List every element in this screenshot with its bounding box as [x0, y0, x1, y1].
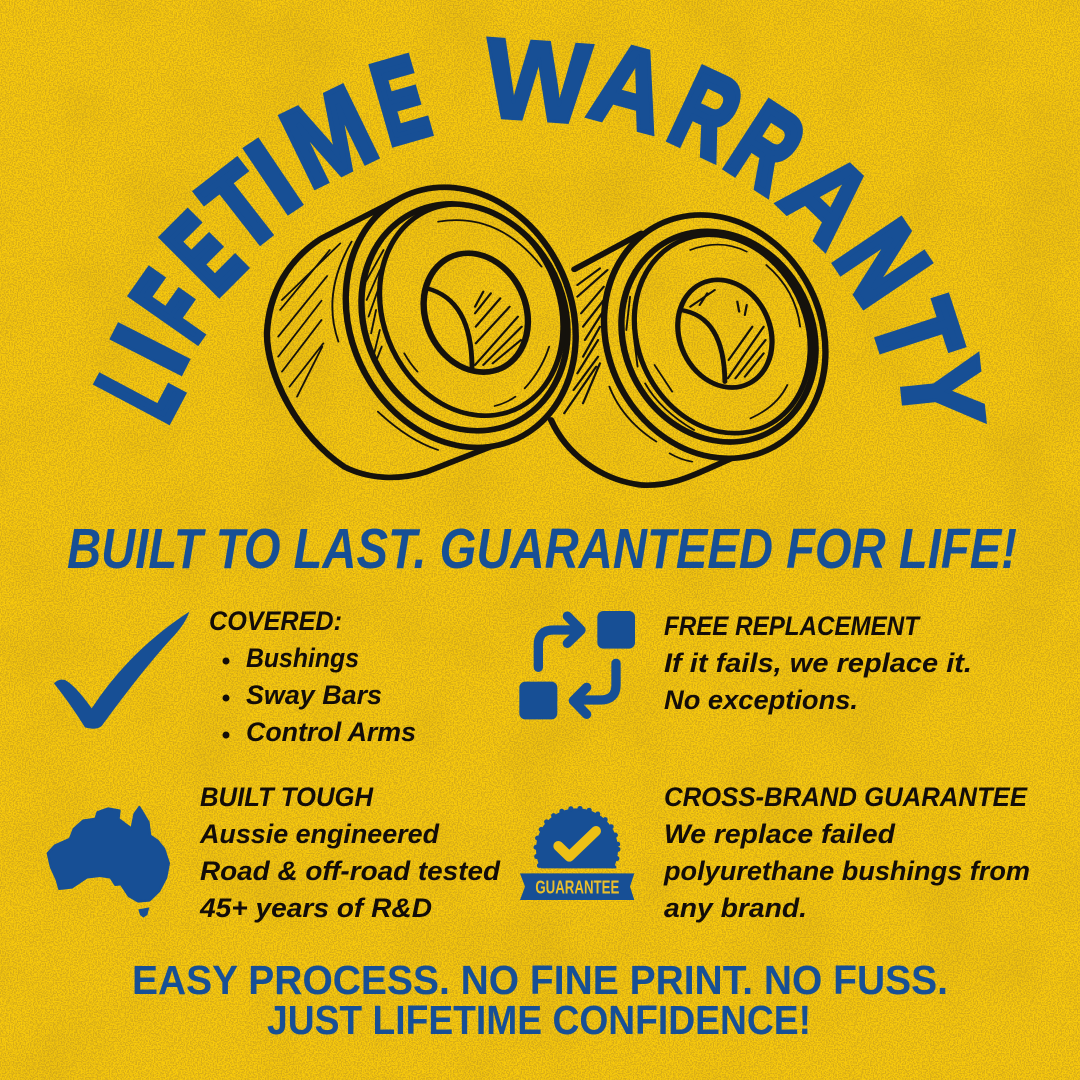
- title: LIFETIME WARRANTY arc: A: [579, 16, 682, 158]
- text block: cross-brand guarantee: any brand.: [664, 893, 807, 923]
- title: LIFETIME WARRANTY arc: Y: [875, 351, 1008, 433]
- icon: guarantee badge: GUARANTEE: [535, 876, 619, 897]
- text block: built tough: [199, 782, 501, 923]
- text block: built tough: 45+ years of R&D: [199, 893, 432, 923]
- title: LIFETIME WARRANTY arc: A: [758, 128, 899, 270]
- title: LIFETIME WARRANTY arc: F: [109, 254, 237, 359]
- title: LIFETIME WARRANTY arc: R: [654, 44, 759, 183]
- closing tagline: [132, 957, 948, 1043]
- left bushing: [267, 164, 608, 477]
- title: LIFETIME WARRANTY arc: [75, 14, 1008, 437]
- text block: covered: Control Arms: [246, 717, 416, 747]
- text block: cross-brand guarantee: CROSS-BRAND GUARANTEE: [664, 782, 1028, 812]
- icon: replacement arrows: [519, 611, 635, 719]
- title: LIFETIME WARRANTY arc: L: [75, 343, 205, 437]
- text block: cross-brand guarantee: polyurethane bushings from: [663, 856, 1030, 886]
- title: LIFETIME WARRANTY arc: I: [87, 307, 214, 392]
- text block: covered: [209, 606, 416, 747]
- text block: covered: Bushings: [246, 643, 359, 673]
- icon: check mark: [54, 612, 189, 729]
- closing tagline: JUST LIFETIME CONFIDENCE!: [267, 997, 811, 1043]
- text block: cross-brand guarantee: [663, 782, 1030, 923]
- text block: covered: COVERED:: [209, 606, 342, 636]
- text block: free replacement: FREE REPLACEMENT: [664, 611, 921, 641]
- title: LIFETIME WARRANTY arc: W: [481, 14, 595, 148]
- icon: Australia map: [48, 807, 169, 918]
- text block: built tough: BUILT TOUGH: [200, 782, 373, 812]
- illustration: two polyurethane bushings: [267, 164, 855, 485]
- title: LIFETIME WARRANTY arc: T: [180, 140, 302, 274]
- title: LIFETIME WARRANTY arc: I: [225, 116, 322, 239]
- title: LIFETIME WARRANTY arc: N: [812, 200, 954, 325]
- title: LIFETIME WARRANTY arc: T: [848, 287, 987, 378]
- title: LIFETIME WARRANTY arc: R: [708, 78, 825, 216]
- title: LIFETIME WARRANTY arc: E: [142, 192, 264, 314]
- text block: covered: Sway Bars: [246, 680, 382, 710]
- title: LIFETIME WARRANTY arc: E: [361, 33, 440, 168]
- right bushing: [551, 193, 855, 485]
- text block: free replacement: [664, 611, 972, 715]
- text block: built tough: Road & off-road tested: [200, 856, 501, 886]
- title: LIFETIME WARRANTY arc: M: [264, 62, 394, 212]
- text block: free replacement: No exceptions.: [664, 685, 858, 715]
- icon: guarantee badge: [520, 808, 634, 900]
- closing tagline: EASY PROCESS. NO FINE PRINT. NO FUSS.: [132, 957, 948, 1003]
- text block: built tough: Aussie engineered: [199, 819, 439, 849]
- text block: cross-brand guarantee: We replace failed: [664, 819, 896, 849]
- text block: free replacement: If it fails, we replace it.: [664, 648, 972, 678]
